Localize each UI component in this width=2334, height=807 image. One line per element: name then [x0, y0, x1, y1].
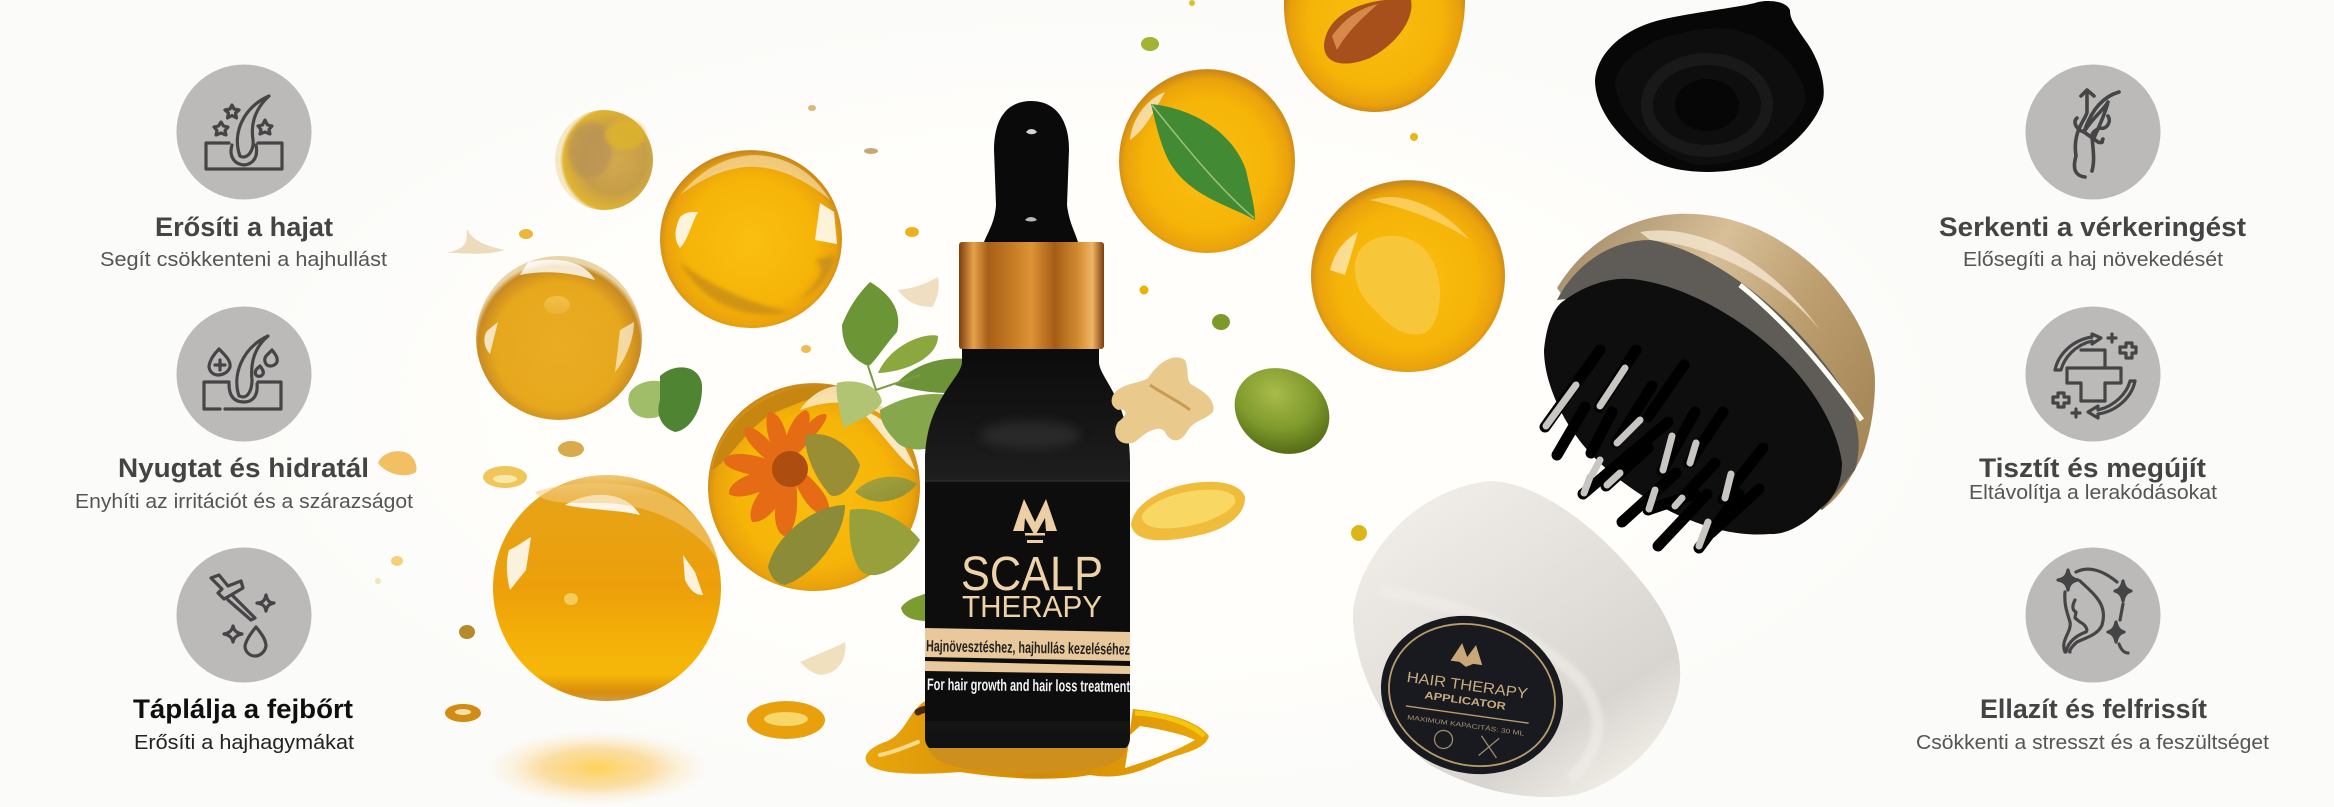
heading: Táplálja a fejbőrt	[133, 694, 353, 724]
bottle body	[925, 349, 1130, 752]
black disc	[1544, 279, 1842, 534]
benefit: cleanses and renews	[1969, 306, 2217, 504]
ginger slice	[1131, 482, 1245, 540]
description: Csökkenti a stresszt és a feszültséget	[1916, 731, 2269, 754]
dropper bulb	[984, 101, 1078, 242]
oil bubble: gold flecked small	[555, 110, 653, 210]
benefit: strengthens hair	[100, 64, 387, 271]
icon: hair follicle with drops	[204, 336, 281, 409]
description: Erősíti a hajhagymákat	[134, 731, 354, 754]
english claim: For hair growth and hair loss treatment	[927, 676, 1130, 696]
central light glow	[250, 0, 2010, 807]
heading: Ellazít és felfrissít	[1980, 694, 2207, 724]
massager pins	[1545, 350, 1763, 548]
icon: hair and arrow circulation	[2074, 90, 2119, 177]
icon: dropper with sparkles	[211, 575, 274, 656]
heading: Tisztít és megújít	[1979, 453, 2206, 483]
cap inner ring	[1647, 59, 1767, 151]
oil bubble: clear top	[660, 150, 842, 328]
heading: Serkenti a vérkeringést	[1939, 212, 2246, 242]
translucent ring	[1557, 240, 1859, 510]
heading: Nyugtat és hidratál	[118, 453, 369, 483]
description: Elősegíti a haj növekedését	[1963, 248, 2223, 271]
icon: hair follicle with stars	[206, 96, 282, 169]
applicator label	[1362, 595, 1582, 795]
ginger root	[1112, 357, 1213, 444]
bottle title: THERAPY	[962, 589, 1102, 624]
oil bubble: flower with leaves	[708, 383, 920, 591]
black cap	[1595, 1, 1824, 172]
petals	[446, 229, 505, 254]
green olive	[1219, 352, 1345, 470]
oil bubble: almond	[1284, 0, 1465, 112]
gold collar	[959, 242, 1104, 349]
benefit: stimulates circulation	[1939, 64, 2246, 271]
bubble shadow glow	[485, 730, 709, 806]
droplet beside heading	[378, 451, 417, 475]
scalp massager	[1544, 214, 1875, 548]
oil bubble: sparkling left	[476, 256, 642, 420]
description: Enyhíti az irritációt és a szárazságot	[75, 490, 413, 513]
applicator label: HAIR THERAPY	[1406, 669, 1529, 703]
heading: Erősíti a hajat	[155, 212, 333, 242]
leaves on bubble	[805, 434, 860, 496]
icon: cross with renewal arrows	[2053, 334, 2136, 418]
small floating droplets	[1140, 0, 1418, 541]
green leaf left	[628, 367, 702, 432]
white applicator	[1353, 481, 1680, 797]
benefit: nourishes scalp	[133, 548, 354, 754]
icon: profile with sparkles	[2058, 569, 2131, 653]
green leaf	[1151, 104, 1255, 220]
oil bubble: ginger	[1311, 180, 1505, 372]
bottle	[925, 101, 1130, 773]
bottle title	[961, 548, 1103, 624]
applicator label: MAXIMUM KAPACITÁS: 30 ML	[1407, 712, 1525, 738]
benefit: soothes and hydrates	[75, 306, 413, 513]
oil bubble: leaf	[1119, 69, 1295, 253]
flower	[724, 410, 829, 536]
description: Segít csökkenteni a hajhullást	[100, 248, 387, 271]
tan band	[925, 628, 1130, 674]
leaf sprig above bubble	[837, 282, 980, 449]
oil bubble: large	[493, 475, 721, 701]
description: Eltávolítja a lerakódásokat	[1969, 481, 2217, 504]
scattered oil droplets and petals left	[288, 105, 939, 739]
benefit: relaxes and refreshes	[1916, 548, 2269, 754]
bottle title: SCALP	[961, 548, 1103, 601]
gold dome	[1557, 214, 1875, 510]
tan band: Hajnövesztéshez, hajhullás kezeléséhez	[926, 638, 1130, 659]
applicator label: APPLICATOR	[1424, 689, 1507, 713]
leaf tip behind bottle	[901, 593, 928, 621]
bottle logo	[1013, 499, 1057, 543]
golden oil pool	[866, 701, 1209, 779]
oil at bottle base	[928, 748, 1126, 773]
